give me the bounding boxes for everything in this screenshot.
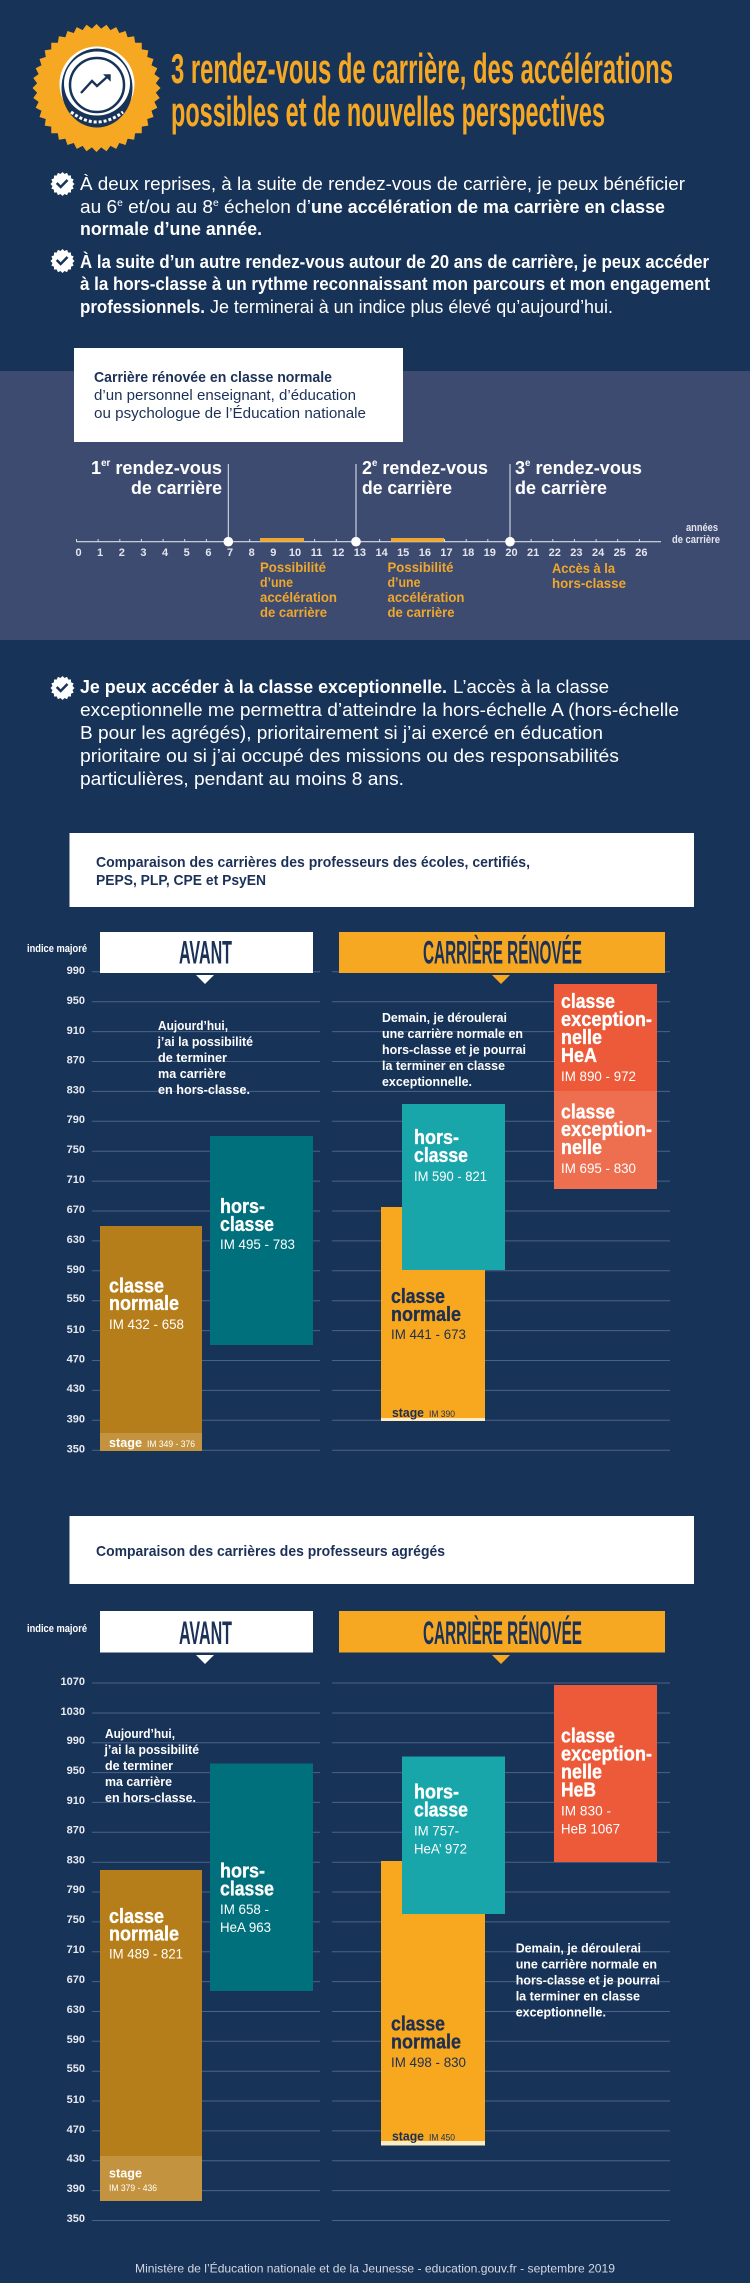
note: demain: hors-classe et je pourrai bbox=[382, 1042, 526, 1057]
note: aujourd'hui bbox=[157, 1018, 253, 1097]
note: demain: la terminer en classe bbox=[382, 1058, 505, 1073]
title bbox=[171, 45, 673, 135]
label: 3e rendez-vous: e bbox=[525, 458, 531, 469]
axis title and values bbox=[27, 943, 87, 1456]
bar: classe exceptionnelle HeB: classe bbox=[561, 1726, 615, 1748]
bar: classe exceptionnelle: nelle bbox=[561, 1137, 602, 1159]
heading box: carrière rénovée en classe normale: ou psychologue de l’Éducation nationale bbox=[94, 405, 366, 422]
note: aujourd'hui: j’ai la possibilité bbox=[104, 1742, 199, 1757]
bar: hors-classe rénovée: hors- bbox=[414, 1127, 459, 1149]
timeline axis: 22 bbox=[549, 547, 561, 559]
text block: accélération: e bbox=[213, 198, 219, 209]
text block: accélération bbox=[80, 173, 685, 239]
heading box: comparaison professeurs agrégés bbox=[70, 1516, 694, 1584]
axis title and values: 630 bbox=[67, 1234, 85, 1246]
label: 3e rendez-vous: rendez-vous bbox=[530, 457, 642, 478]
bar: classe normale avant: IM 489 - 821 bbox=[109, 1946, 183, 1962]
axis title and values: 870 bbox=[67, 1054, 85, 1066]
bar: hors-classe avant: HeA 963 bbox=[220, 1919, 271, 1935]
label: années de carrière: de carrière bbox=[672, 534, 720, 546]
text block: hors-classe: professionnels. bbox=[80, 297, 205, 317]
note: demain: exceptionnelle. bbox=[382, 1074, 472, 1089]
axis title and values: indice majoré bbox=[27, 1623, 87, 1635]
label: 2e rendez-vous: rendez-vous bbox=[377, 457, 488, 478]
text block: classe exceptionnelle: exceptionnelle me permettra d’atteindre la hors-échelle A (hors-échelle bbox=[80, 699, 679, 720]
timeline axis: 15 bbox=[397, 547, 409, 559]
label: possibilité d'accélération 2: d’une bbox=[388, 574, 421, 590]
icon: check 1 bbox=[50, 172, 75, 196]
bar: classe exceptionnelle HeB: nelle bbox=[561, 1762, 602, 1784]
bar: classe normale avant: IM 432 - 658 bbox=[109, 1316, 184, 1332]
axis title and values: 790 bbox=[67, 1884, 85, 1896]
bar: hors-classe avant: classe bbox=[220, 1214, 274, 1236]
bar: classe normale avant: stage bbox=[109, 2166, 142, 2180]
bar: hors-classe avant: IM 658 - bbox=[220, 1901, 269, 1917]
bar: classe normale rénovée: normale bbox=[391, 1304, 461, 1326]
axis title and values: 710 bbox=[67, 1174, 85, 1186]
note: aujourd'hui: ma carrière bbox=[105, 1774, 172, 1789]
axis title and values: 590 bbox=[67, 2034, 85, 2046]
heading box: comparaison professeurs agrégés: Comparaison des carrières des professeurs agrégés bbox=[96, 1543, 445, 1560]
note: aujourd'hui: Aujourd’hui, bbox=[105, 1726, 175, 1741]
text block: accélération: e bbox=[117, 198, 123, 209]
bar: classe normale rénovée: IM 498 - 830 bbox=[391, 2054, 466, 2070]
header: carrière rénovée: CARRIÈRE RÉNOVÉE bbox=[423, 934, 582, 970]
bar: classe normale rénovée bbox=[381, 1207, 485, 1421]
bar: classe exceptionnelle HeA bbox=[554, 984, 657, 1091]
axis title and values: 870 bbox=[67, 1824, 85, 1836]
bar: classe normale rénovée: stage bbox=[392, 2128, 424, 2144]
bar: classe normale avant bbox=[100, 1870, 202, 2201]
timeline axis: 4 bbox=[162, 547, 169, 559]
timeline axis: 8 bbox=[249, 547, 255, 559]
label: possibilité d'accélération 2: Possibilité bbox=[388, 559, 454, 575]
timeline axis: 24 bbox=[592, 547, 605, 559]
bar: classe normale rénovée: stage bbox=[392, 1405, 424, 1420]
axis title and values: 710 bbox=[67, 1944, 85, 1956]
note: demain: Demain, je déroulerai bbox=[516, 1940, 641, 1956]
text block: hors-classe: à la hors-classe à un rythme reconnaissant mon parcours et mon engagement bbox=[80, 274, 710, 294]
note: demain: une carrière normale en bbox=[516, 1956, 657, 1972]
text block: accélération: échelon d’ bbox=[219, 196, 311, 217]
text block: hors-classe: Je terminerai à un indice plus élevé qu’aujourd’hui. bbox=[210, 296, 613, 317]
bar: hors-classe rénovée: IM 590 - 821 bbox=[414, 1168, 487, 1184]
axis title and values: 950 bbox=[67, 1765, 85, 1777]
note: aujourd'hui: en hors-classe. bbox=[105, 1790, 196, 1805]
axis title and values: 430 bbox=[67, 1383, 85, 1395]
heading box: carrière rénovée en classe normale bbox=[74, 348, 403, 442]
text block: classe exceptionnelle: B pour les agrégés), prioritairement si j’ai exercé en éducation bbox=[80, 722, 603, 743]
bar: hors-classe avant: hors- bbox=[220, 1196, 265, 1218]
icon: badge with rising chart coin bbox=[33, 24, 160, 152]
axis title and values: 510 bbox=[67, 1324, 85, 1336]
note: demain bbox=[516, 1940, 660, 2020]
label: 1er rendez-vous bbox=[91, 457, 222, 498]
bar: hors-classe avant bbox=[210, 1764, 313, 1991]
axis title and values: 990 bbox=[67, 965, 85, 977]
timeline axis: 21 bbox=[527, 547, 539, 559]
label: possibilité d'accélération 2: accélération bbox=[388, 589, 464, 605]
axis title and values: 470 bbox=[67, 1354, 85, 1366]
heading box: comparaison professeurs des écoles: Comparaison des carrières des professeurs des écoles, certifiés, bbox=[96, 854, 530, 871]
axis title and values: 350 bbox=[67, 2213, 85, 2225]
note: aujourd'hui: j’ai la possibilité bbox=[157, 1034, 253, 1049]
axis title and values bbox=[27, 1623, 87, 2225]
header: avant bbox=[100, 1611, 313, 1664]
bar: hors-classe rénovée bbox=[402, 1756, 505, 1914]
label: 1er rendez-vous: rendez-vous bbox=[110, 457, 222, 478]
bar: classe normale rénovée: classe bbox=[391, 1286, 445, 1308]
axis title and values: 590 bbox=[67, 1264, 85, 1276]
heading box: comparaison professeurs des écoles: PEPS, PLP, CPE et PsyEN bbox=[96, 872, 266, 889]
note: aujourd'hui: en hors-classe. bbox=[158, 1082, 250, 1097]
bar: hors-classe rénovée: classe bbox=[414, 1800, 468, 1822]
bar: classe normale avant: classe bbox=[109, 1276, 164, 1298]
label: années de carrière bbox=[672, 522, 720, 546]
header: carrière rénovée: CARRIÈRE RÉNOVÉE bbox=[423, 1615, 582, 1651]
bar: classe normale avant: normale bbox=[109, 1293, 179, 1315]
timeline axis: 26 bbox=[635, 547, 648, 559]
bar: classe normale avant: IM 379 - 436 bbox=[109, 2183, 157, 2194]
text block: classe exceptionnelle: Je peux accéder à la classe exceptionnelle. bbox=[80, 677, 447, 697]
axis title and values: indice majoré bbox=[27, 943, 87, 955]
timeline axis: 14 bbox=[375, 547, 389, 559]
text block: accélération: À deux reprises, à la suite de rendez-vous de carrière, je peux bénéficier bbox=[80, 173, 685, 194]
text block: classe exceptionnelle: particulières, pendant au moins 8 ans. bbox=[80, 768, 404, 789]
axis title and values: 750 bbox=[67, 1914, 85, 1926]
axis title and values: 750 bbox=[67, 1144, 85, 1156]
axis title and values: 390 bbox=[67, 1414, 85, 1426]
bar: classe normale avant: stage bbox=[109, 1435, 142, 1450]
bar: classe normale avant: normale bbox=[109, 1924, 179, 1946]
text block: hors-classe bbox=[80, 251, 710, 317]
bar: classe exceptionnelle HeA: classe bbox=[561, 991, 615, 1013]
axis title and values: 550 bbox=[67, 1293, 85, 1305]
bar: classe exceptionnelle HeB: exception- bbox=[561, 1744, 652, 1766]
text block: hors-classe: À la suite d’un autre rendez-vous autour de 20 ans de carrière, je peux accéder bbox=[80, 251, 709, 272]
header: carrière rénovée bbox=[339, 932, 665, 984]
bar: hors-classe avant: hors- bbox=[220, 1860, 265, 1882]
timeline axis: 12 bbox=[332, 547, 344, 559]
label: accès à la hors-classe bbox=[552, 560, 626, 591]
timeline axis: 0 bbox=[75, 547, 82, 559]
timeline axis: 2 bbox=[119, 547, 125, 559]
timeline axis: 3 bbox=[140, 547, 146, 559]
bar: hors-classe rénovée: HeA’ 972 bbox=[414, 1840, 467, 1856]
bar: classe exceptionnelle HeB bbox=[554, 1685, 657, 1862]
bar: classe exceptionnelle HeA: nelle bbox=[561, 1027, 602, 1049]
label: possibilité d'accélération 1: Possibilité bbox=[260, 559, 326, 575]
bar: classe normale avant: IM 349 - 376 bbox=[147, 1439, 195, 1450]
axis title and values: 430 bbox=[67, 2153, 85, 2165]
note: aujourd'hui: de terminer bbox=[105, 1758, 173, 1773]
text block: accélération: une accélération de ma carrière en classe bbox=[311, 197, 665, 217]
chart 2: comparaison des carrières agrégés bbox=[27, 1611, 670, 2225]
bar: hors-classe rénovée: hors- bbox=[414, 1782, 459, 1804]
bar: classe normale rénovée: IM 441 - 673 bbox=[391, 1326, 466, 1342]
bar: classe exceptionnelle HeB: IM 830 - bbox=[561, 1802, 611, 1818]
timeline axis: 17 bbox=[440, 547, 453, 559]
axis title and values: 390 bbox=[67, 2183, 85, 2195]
label: possibilité d'accélération 1: accélération bbox=[260, 589, 337, 605]
note: aujourd'hui bbox=[104, 1726, 199, 1805]
bar: classe exceptionnelle: exception- bbox=[561, 1119, 652, 1141]
label: 1er rendez-vous: de carrière bbox=[131, 477, 222, 498]
label: 3e rendez-vous bbox=[515, 457, 642, 498]
bar: classe normale rénovée: classe bbox=[391, 2014, 445, 2036]
bar: classe normale rénovée: IM 390 bbox=[429, 1409, 455, 1420]
axis title and values: 670 bbox=[67, 1974, 85, 1986]
note: demain: exceptionnelle. bbox=[516, 2004, 606, 2020]
note: demain: une carrière normale en bbox=[382, 1026, 523, 1041]
panel: timeline band bbox=[0, 348, 750, 640]
bar: classe exceptionnelle: IM 695 - 830 bbox=[561, 1160, 636, 1176]
footer: Ministère de l’Éducation nationale et de la Jeunesse - education.gouv.fr - septembre 2019 bbox=[135, 2260, 615, 2276]
note: aujourd'hui: Aujourd’hui, bbox=[158, 1018, 228, 1033]
note: demain: la terminer en classe bbox=[516, 1988, 640, 2004]
timeline axis: 1 bbox=[97, 547, 103, 559]
bar: classe exceptionnelle HeB: HeB bbox=[561, 1780, 596, 1802]
note: demain bbox=[382, 1010, 526, 1089]
timeline axis: 20 bbox=[505, 547, 518, 559]
header: avant bbox=[100, 932, 313, 984]
heading box: carrière rénovée en classe normale: d’un personnel enseignant, d’éducation bbox=[94, 387, 356, 404]
timeline axis: 9 bbox=[270, 547, 276, 559]
axis title and values: 1030 bbox=[61, 1706, 85, 1718]
axis title and values: 630 bbox=[67, 2004, 85, 2016]
label: 1er rendez-vous: 1 bbox=[91, 457, 101, 478]
bar: hors-classe rénovée bbox=[402, 1104, 505, 1270]
timeline axis: 18 bbox=[462, 547, 474, 559]
bar: hors-classe avant bbox=[210, 1136, 313, 1345]
icon: check 3 bbox=[50, 676, 75, 700]
timeline axis: 19 bbox=[484, 547, 496, 559]
timeline axis: 5 bbox=[184, 547, 190, 559]
bar: hors-classe avant: classe bbox=[220, 1878, 274, 1900]
bar: classe exceptionnelle HeA: IM 890 - 972 bbox=[561, 1068, 636, 1084]
axis title and values: 990 bbox=[67, 1735, 85, 1747]
text block: accélération: au 6 bbox=[80, 196, 116, 217]
label: accès à la hors-classe: Accès à la bbox=[552, 560, 615, 576]
label: 1er rendez-vous: er bbox=[101, 458, 110, 469]
label: 3e rendez-vous: 3 bbox=[515, 457, 525, 478]
note: aujourd'hui: ma carrière bbox=[158, 1066, 226, 1081]
axis title and values: 670 bbox=[67, 1204, 85, 1216]
text block: classe exceptionnelle bbox=[80, 676, 679, 789]
timeline axis: 10 bbox=[289, 547, 301, 559]
note: demain: hors-classe et je pourrai bbox=[516, 1972, 660, 1988]
bar: classe exceptionnelle: classe bbox=[561, 1102, 615, 1124]
axis title and values: 910 bbox=[67, 1025, 85, 1037]
label: possibilité d'accélération 1: de carrière bbox=[260, 604, 327, 620]
axis title and values: 1070 bbox=[61, 1676, 85, 1688]
note: demain: Demain, je déroulerai bbox=[382, 1010, 507, 1025]
axis title and values: 910 bbox=[67, 1795, 85, 1807]
timeline axis: 6 bbox=[205, 547, 211, 559]
label: années de carrière: années bbox=[686, 522, 718, 534]
chart 1: comparaison des carrières bbox=[27, 932, 670, 1456]
text block: classe exceptionnelle: L’accès à la classe bbox=[453, 676, 609, 697]
label: possibilité d'accélération 2 bbox=[388, 559, 464, 620]
timeline axis: 16 bbox=[419, 547, 431, 559]
label: accès à la hors-classe: hors-classe bbox=[552, 575, 626, 591]
timeline axis: 25 bbox=[614, 547, 626, 559]
bar: hors-classe avant: IM 495 - 783 bbox=[220, 1236, 295, 1252]
axis title and values: 790 bbox=[67, 1114, 85, 1126]
label: 2e rendez-vous: 2 bbox=[362, 457, 372, 478]
header: carrière rénovée bbox=[339, 1611, 665, 1664]
bar: classe exceptionnelle HeA: exception- bbox=[561, 1009, 652, 1031]
heading box: carrière rénovée en classe normale: Carrière rénovée en classe normale bbox=[94, 369, 332, 386]
timeline axis bbox=[75, 464, 661, 559]
heading box: comparaison professeurs des écoles bbox=[70, 833, 694, 907]
bar: classe exceptionnelle bbox=[554, 1091, 657, 1189]
bar: classe exceptionnelle HeA: HeA bbox=[561, 1045, 597, 1067]
label: possibilité d'accélération 1 bbox=[260, 559, 337, 620]
text block: classe exceptionnelle: prioritaire ou si j’ai occupé des missions ou des responsabilités bbox=[80, 745, 619, 766]
label: 2e rendez-vous: e bbox=[372, 458, 378, 469]
bar: hors-classe rénovée: IM 757- bbox=[414, 1822, 459, 1838]
text block: accélération: et/ou au 8 bbox=[123, 196, 213, 217]
text block: accélération: normale d’une année. bbox=[80, 219, 262, 239]
label: 2e rendez-vous: de carrière bbox=[362, 477, 452, 498]
label: 2e rendez-vous bbox=[362, 457, 488, 498]
label: possibilité d'accélération 1: d’une bbox=[260, 574, 293, 590]
axis title and values: 830 bbox=[67, 1084, 85, 1096]
bar: hors-classe rénovée: classe bbox=[414, 1145, 468, 1167]
icon: check 2 bbox=[50, 249, 75, 273]
header: avant: AVANT bbox=[179, 934, 232, 970]
bar: classe normale avant bbox=[100, 1226, 202, 1451]
timeline axis: 11 bbox=[311, 547, 322, 559]
axis title and values: 470 bbox=[67, 2124, 85, 2136]
note: aujourd'hui: de terminer bbox=[158, 1050, 227, 1065]
bar: classe exceptionnelle HeB: HeB 1067 bbox=[561, 1820, 620, 1836]
axis title and values: 830 bbox=[67, 1854, 85, 1866]
axis title and values: 350 bbox=[67, 1444, 85, 1456]
axis title and values: 550 bbox=[67, 2063, 85, 2075]
bar: classe normale rénovée: normale bbox=[391, 2032, 461, 2054]
label: 3e rendez-vous: de carrière bbox=[515, 477, 607, 498]
axis title and values: 950 bbox=[67, 995, 85, 1007]
label: possibilité d'accélération 2: de carrière bbox=[388, 604, 455, 620]
timeline axis: 23 bbox=[570, 547, 583, 559]
bar: classe normale rénovée: IM 450 bbox=[429, 2132, 455, 2144]
bar: classe normale avant: classe bbox=[109, 1906, 164, 1928]
timeline axis: 13 bbox=[354, 547, 366, 559]
header: avant: AVANT bbox=[179, 1615, 232, 1651]
axis title and values: 510 bbox=[67, 2094, 85, 2106]
timeline axis: 7 bbox=[227, 547, 233, 559]
bar: classe normale rénovée bbox=[381, 1861, 485, 2146]
